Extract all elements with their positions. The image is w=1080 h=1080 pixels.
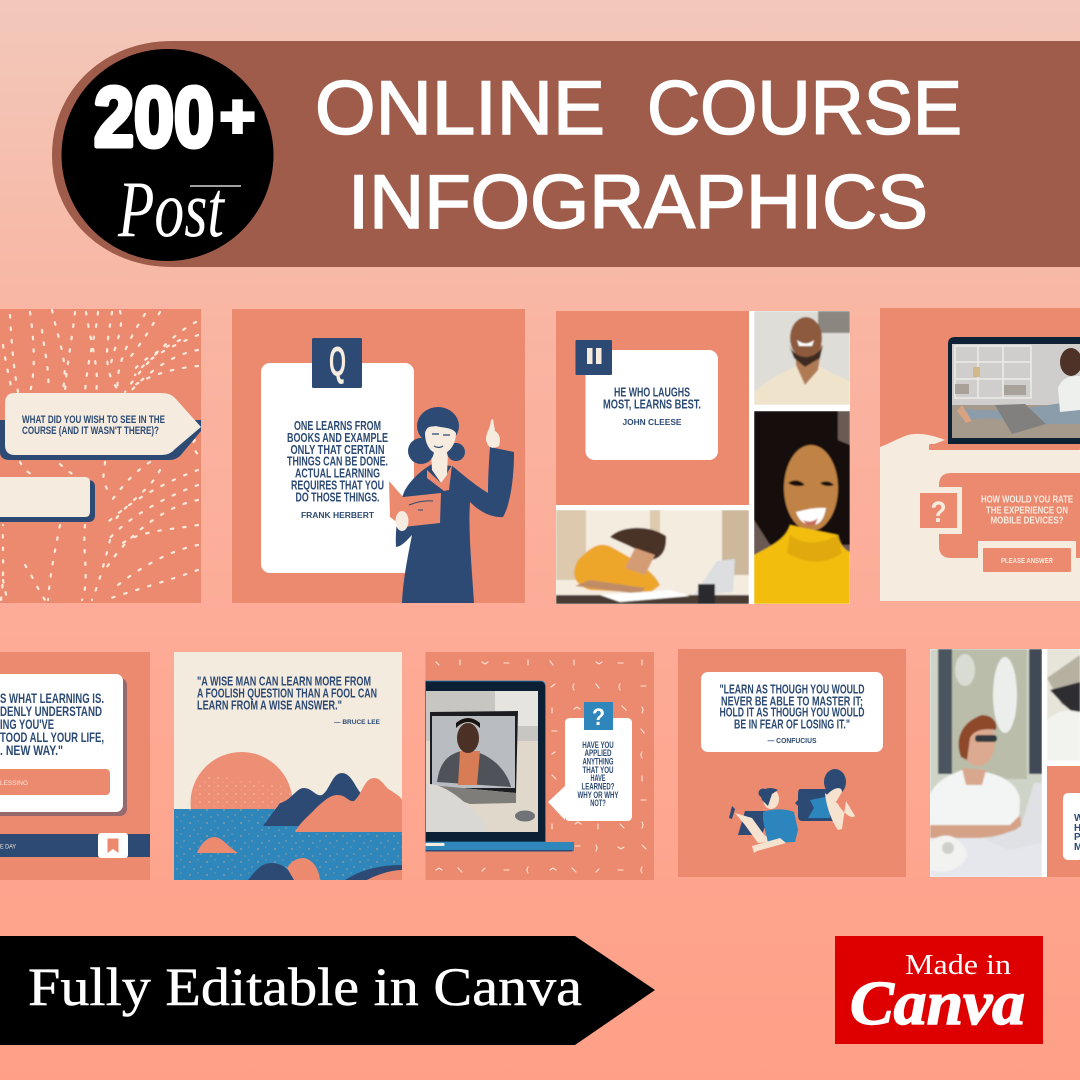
quote text — [0, 690, 104, 758]
icon: question mark: ? — [930, 496, 946, 529]
ribbon: fully editable — [0, 936, 655, 1045]
speech bubble — [548, 718, 632, 821]
badge: 200+ post: 200 — [94, 70, 214, 164]
quote text: — CONFUCIUS — [768, 738, 817, 745]
quote text: JOHN CLEESE — [622, 418, 682, 427]
speech arrow: question: COURSE (AND IT WASN'T THERE)? — [22, 425, 159, 437]
quote text: ACTUAL LEARNING — [295, 466, 380, 480]
panel: reflection question — [426, 652, 654, 880]
salmon card block — [1047, 766, 1080, 877]
button: please answer — [978, 541, 1076, 572]
icon: pause badge — [576, 340, 612, 375]
panel: photo collage — [930, 649, 1080, 877]
question text: THAT YOU — [582, 765, 614, 775]
badge: 200+ post — [62, 49, 274, 261]
title text: COURSE — [647, 66, 962, 151]
panel: Frank Herbert quote — [232, 309, 525, 603]
question text: APPLIED — [584, 748, 612, 758]
dashed pattern — [1, 310, 198, 602]
photo: girl writing — [556, 510, 749, 604]
question text: ANYTHING — [582, 756, 614, 766]
quote text: DENLY UNDERSTAND — [0, 703, 102, 719]
panel: John Cleese collage — [556, 311, 850, 604]
question text — [982, 496, 1073, 524]
photo: laughing man — [754, 311, 850, 405]
badge: made in canva: Made in — [905, 950, 1011, 981]
quote text: HE WHO LAUGHS — [614, 384, 690, 400]
badge: made in canva — [835, 936, 1043, 1044]
quote text: "LEARN AS THOUGH YOU WOULD — [720, 682, 864, 696]
quote card — [261, 363, 414, 573]
quote text: A FOOLISH QUESTION THAN A FOOL CAN — [197, 686, 377, 700]
quote card — [0, 674, 127, 816]
title banner — [52, 41, 1080, 267]
speech arrow: question — [0, 393, 201, 460]
quote card — [701, 672, 883, 752]
footer bar — [0, 834, 150, 857]
photo: woman at laptop — [930, 649, 1042, 877]
icon: Q badge — [312, 338, 362, 388]
quote text — [720, 682, 864, 745]
illustration: two students — [729, 769, 855, 853]
badge: 200+ post: Post — [117, 166, 225, 254]
quote text: S WHAT LEARNING IS. — [0, 690, 104, 706]
title text — [315, 66, 962, 245]
question text: LEARNED? — [582, 782, 614, 792]
author button — [0, 769, 110, 795]
footer bar: E DAY — [0, 844, 16, 850]
quote text — [197, 674, 381, 726]
quote card — [586, 350, 718, 460]
quote text: HOLD IT AS THOUGH YOU WOULD — [720, 704, 864, 720]
quote text: ONLY THAT CERTAIN — [290, 442, 384, 457]
photo: smiling woman — [754, 411, 850, 604]
quote text: BOOKS AND EXAMPLE — [287, 430, 388, 445]
question card — [939, 473, 1080, 558]
panel: Confucius quote — [678, 649, 906, 877]
title text: ONLINE — [315, 66, 605, 151]
quote text: NEVER BE ABLE TO MASTER IT; — [721, 694, 863, 708]
photo: person with tablet — [1047, 649, 1080, 761]
icon: bookmark — [98, 833, 128, 858]
decorative marks — [436, 660, 646, 873]
quote text — [603, 384, 701, 427]
speech arrow: question: WHAT DID YOU WISH TO SEE IN THE — [22, 414, 165, 426]
icon: Q badge: Q — [329, 338, 346, 385]
panel: mobile experience question — [880, 308, 1080, 601]
question text: NOT? — [590, 798, 606, 808]
ribbon: fully editable: Fully Editable in Canva — [28, 957, 582, 1017]
panel: feedback question — [0, 309, 201, 603]
question text: HAVE — [590, 773, 606, 783]
icon: question mark — [920, 487, 962, 534]
laptop with video call — [426, 681, 574, 852]
badge: made in canva: Canva — [850, 970, 1025, 1038]
quote text: LEARN FROM A WISE ANSWER." — [197, 698, 342, 712]
title text: INFOGRAPHICS — [348, 160, 928, 245]
panel: Bruce Lee quote — [174, 652, 402, 880]
icon: blue question badge — [584, 702, 613, 731]
question text: HAVE YOU — [582, 740, 614, 750]
button: please answer: PLEASE ANSWER — [1001, 556, 1053, 565]
quote text: ING YOU'VE — [0, 716, 54, 732]
panel: Lessing quote — [0, 652, 150, 880]
quote text: TOOD ALL YOUR LIFE, — [0, 729, 104, 745]
quote text: REQUIRES THAT YOU — [291, 478, 384, 492]
question text: WHY OR WHY — [578, 790, 618, 800]
question text: MOBILE DEVICES? — [990, 516, 1064, 526]
quote text — [287, 418, 388, 520]
icon: blue question badge: ? — [592, 704, 605, 731]
answer box — [0, 477, 95, 522]
quote text: DO THOSE THINGS. — [296, 490, 380, 504]
quote text: ONE LEARNS FROM — [294, 418, 381, 433]
laptop with photo — [929, 337, 1080, 450]
quote text: . NEW WAY." — [0, 742, 63, 758]
question text — [578, 740, 618, 808]
quote text: MOST, LEARNS BEST. — [603, 396, 701, 412]
quote text: — BRUCE LEE — [334, 719, 381, 726]
quote text: "A WISE MAN CAN LEARN MORE FROM — [197, 674, 371, 688]
badge: 200+ post: + — [220, 83, 255, 150]
quote text: FRANK HERBERT — [301, 511, 374, 520]
quote text: THINGS CAN BE DONE. — [287, 454, 388, 468]
quote text: BE IN FEAR OF LOSING IT." — [734, 716, 850, 732]
illustration: teacher — [389, 407, 514, 603]
author button: LESSING — [0, 780, 28, 787]
illustration: sun and sea — [174, 752, 402, 880]
